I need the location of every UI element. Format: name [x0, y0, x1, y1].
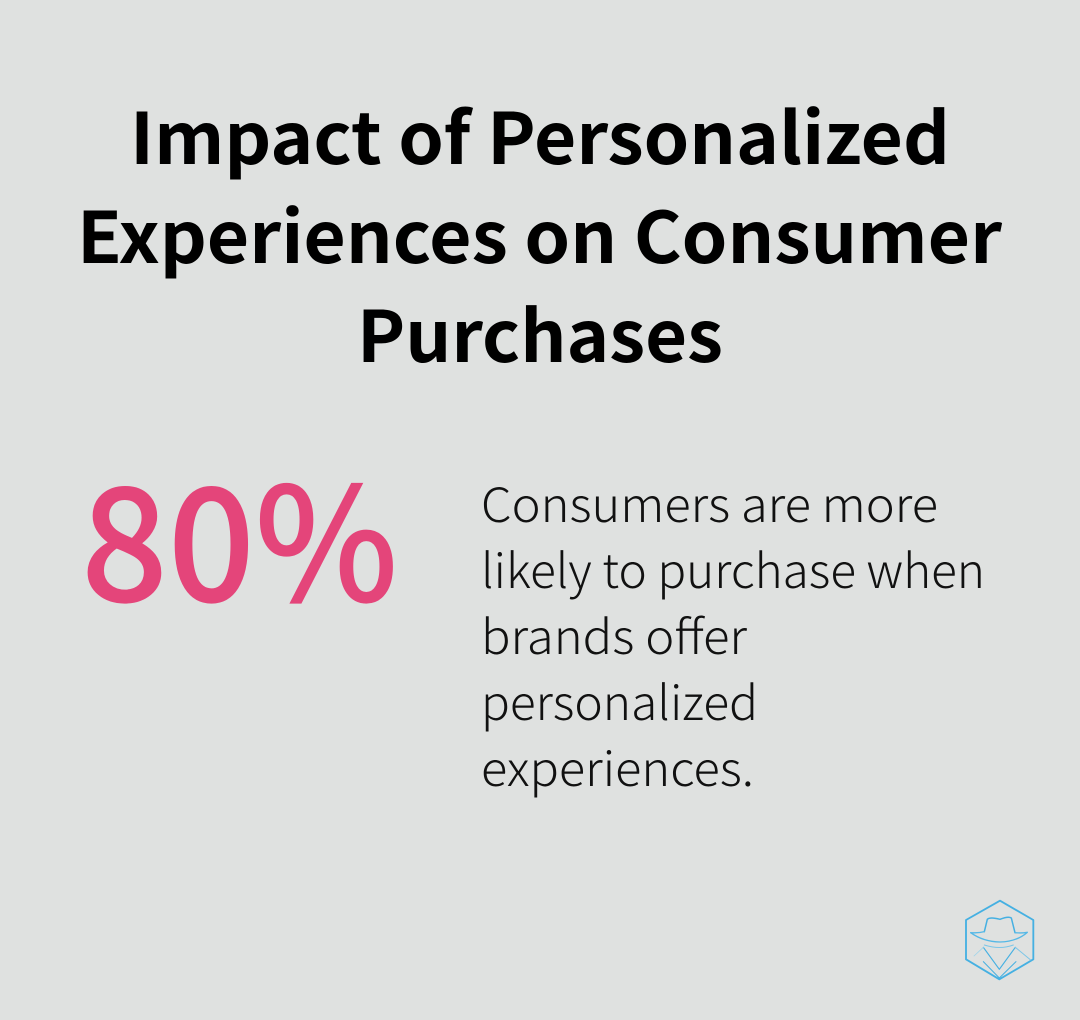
title: Experiences on Consumer	[77, 182, 1003, 284]
description text: likely to purchase when	[481, 533, 985, 602]
description text: Consumers are more	[481, 467, 938, 536]
icon: logo, hat and coat in hexagon	[966, 901, 1033, 979]
description text: experiences.	[481, 731, 754, 800]
statistic: 80%: 80%	[81, 420, 398, 647]
description text	[481, 467, 985, 800]
description text: personalized	[481, 665, 758, 734]
title	[77, 83, 1003, 383]
title: Purchases	[357, 281, 723, 383]
description text: brands offer	[481, 599, 748, 668]
title: Impact of Personalized	[130, 83, 950, 185]
